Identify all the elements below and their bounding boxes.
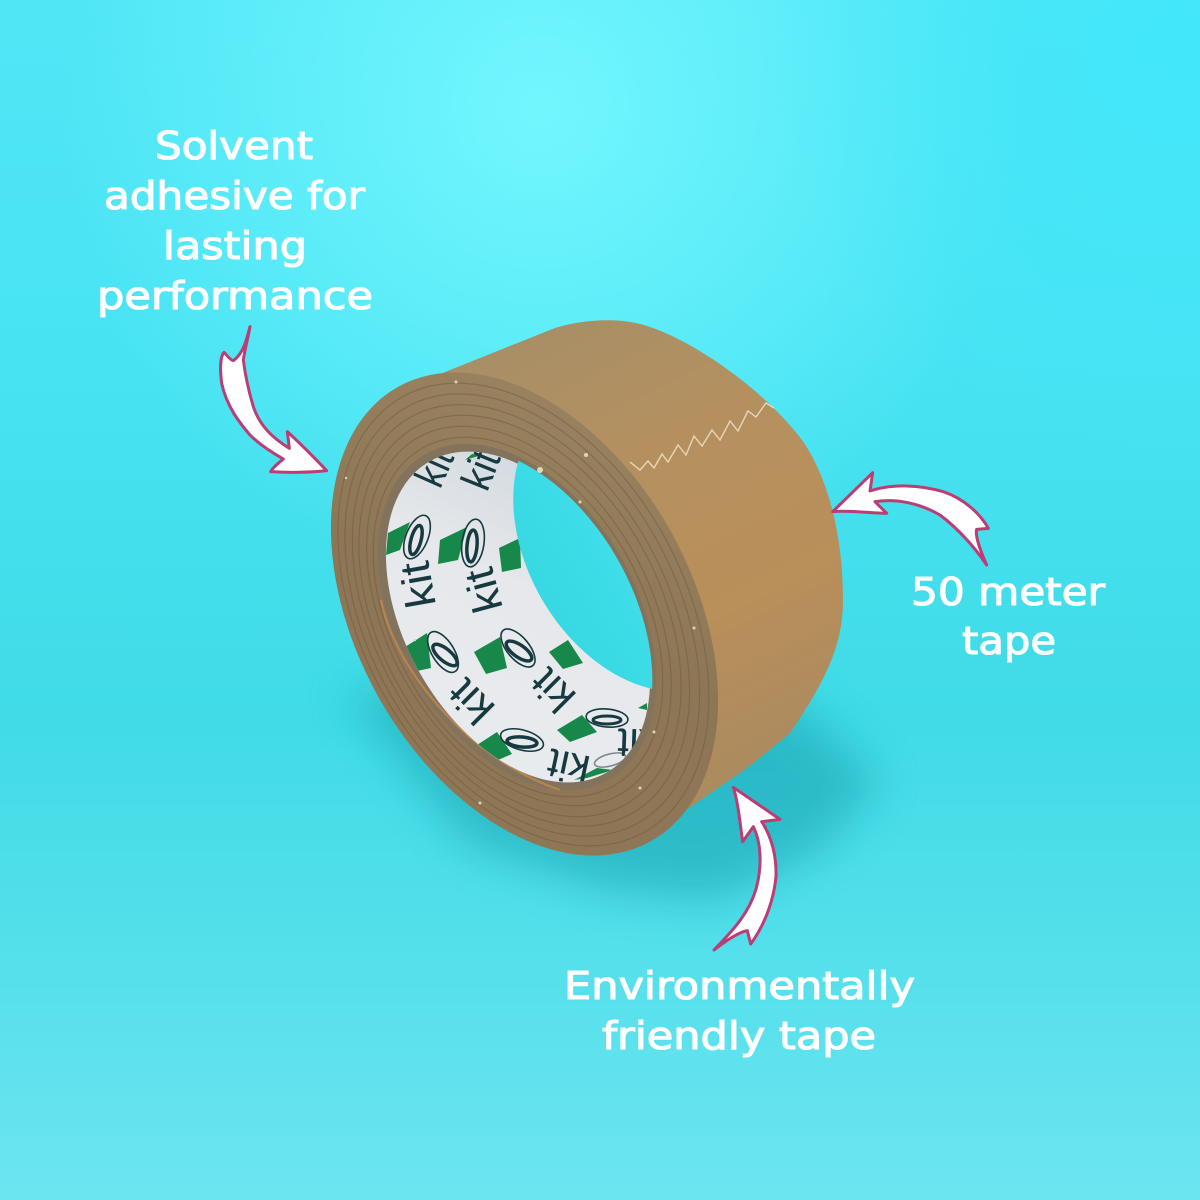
swirl logo marks [398,512,629,770]
callout text: environmentally friendly: friendly tape [602,1014,876,1058]
arrow: length callout [833,473,988,565]
kit wordmarks: kit [452,443,510,496]
tape roll [330,320,843,856]
core liner [332,406,704,828]
arrow: eco callout [714,787,780,950]
wound layer rings [262,319,785,910]
kit wordmarks: kit [616,720,660,768]
green logo blocks [386,454,647,780]
tape front face [252,305,797,923]
centre hole [513,460,652,689]
inner core rim [320,395,714,839]
callout text: environmentally friendly [564,964,915,1058]
callout text: 50 meter tape: tape [962,619,1056,663]
kit wordmarks: kit [391,558,445,612]
kit wordmarks: kit [543,739,594,794]
adhesive edge line [381,600,560,790]
callout text: solvent adhesive: Solvent [155,124,313,168]
seam stitching [630,403,774,470]
callout text: solvent adhesive: performance [97,274,373,318]
kit wordmarks: kit [521,659,584,722]
callout text: solvent adhesive: lasting [163,224,307,268]
callout text: 50 meter tape: 50 meter [911,570,1105,614]
callout text: solvent adhesive [97,124,373,318]
callout text: 50 meter tape [911,570,1105,663]
tape shadow [345,690,880,900]
kit wordmarks: kit [405,441,463,494]
kit wordmarks: kit [439,669,503,734]
callout text: environmentally friendly: Environmentally [564,964,915,1008]
kite logos on core [386,452,647,782]
kit wordmarks [400,452,642,782]
kit wordmarks: kit [455,563,512,618]
tape outer side [440,320,843,838]
callout text: solvent adhesive: adhesive for [104,174,365,218]
arrow: adhesive callout [221,327,327,472]
tape surface specks [345,380,696,804]
